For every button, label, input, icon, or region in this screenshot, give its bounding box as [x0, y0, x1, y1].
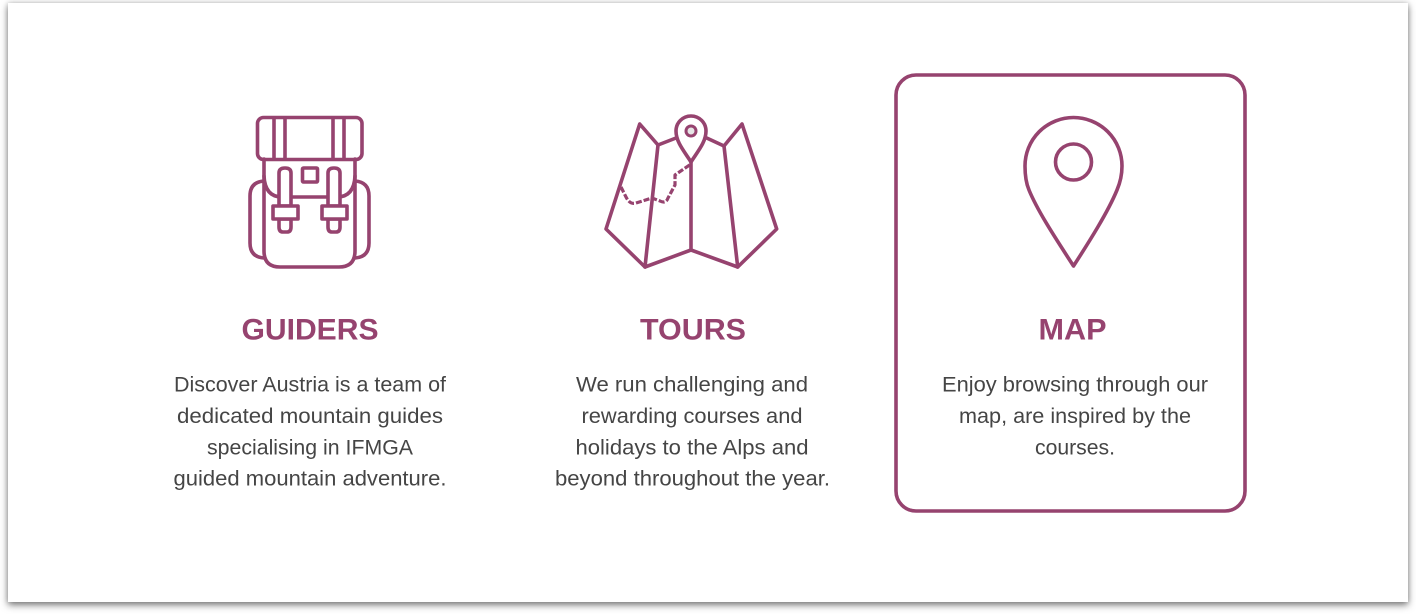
text: map description: map, are inspired by the — [959, 405, 1191, 428]
text: tours description: rewarding courses and — [582, 405, 802, 428]
heading: tours: TOURS — [640, 314, 746, 346]
panel: tours — [555, 116, 830, 490]
text: map description: courses. — [1035, 436, 1115, 460]
panel border — [896, 75, 1245, 511]
heading: guiders: GUIDERS — [242, 314, 378, 346]
text: guiders description: specialising in IFMGA — [207, 436, 413, 460]
panel: guiders — [174, 118, 446, 490]
text: tours description — [555, 374, 830, 490]
text: guiders description — [174, 374, 446, 490]
icon: location pin — [1025, 118, 1122, 266]
text: tours description: holidays to the Alps and — [576, 436, 808, 460]
icon: backpack — [250, 118, 369, 267]
icon: folded map with pin — [606, 116, 777, 267]
text: tours description: We run challenging and — [576, 374, 808, 396]
text: map description: Enjoy browsing through our — [942, 374, 1208, 396]
text: guiders description: Discover Austria is a team of — [174, 374, 446, 396]
text: guiders description: dedicated mountain guides — [177, 405, 443, 428]
text: tours description: beyond throughout the year. — [555, 468, 830, 490]
text: map description — [942, 374, 1208, 460]
text: guiders description: guided mountain adventure. — [174, 468, 446, 490]
panel: map (highlighted) — [896, 75, 1245, 511]
heading: map: MAP — [1038, 314, 1106, 346]
